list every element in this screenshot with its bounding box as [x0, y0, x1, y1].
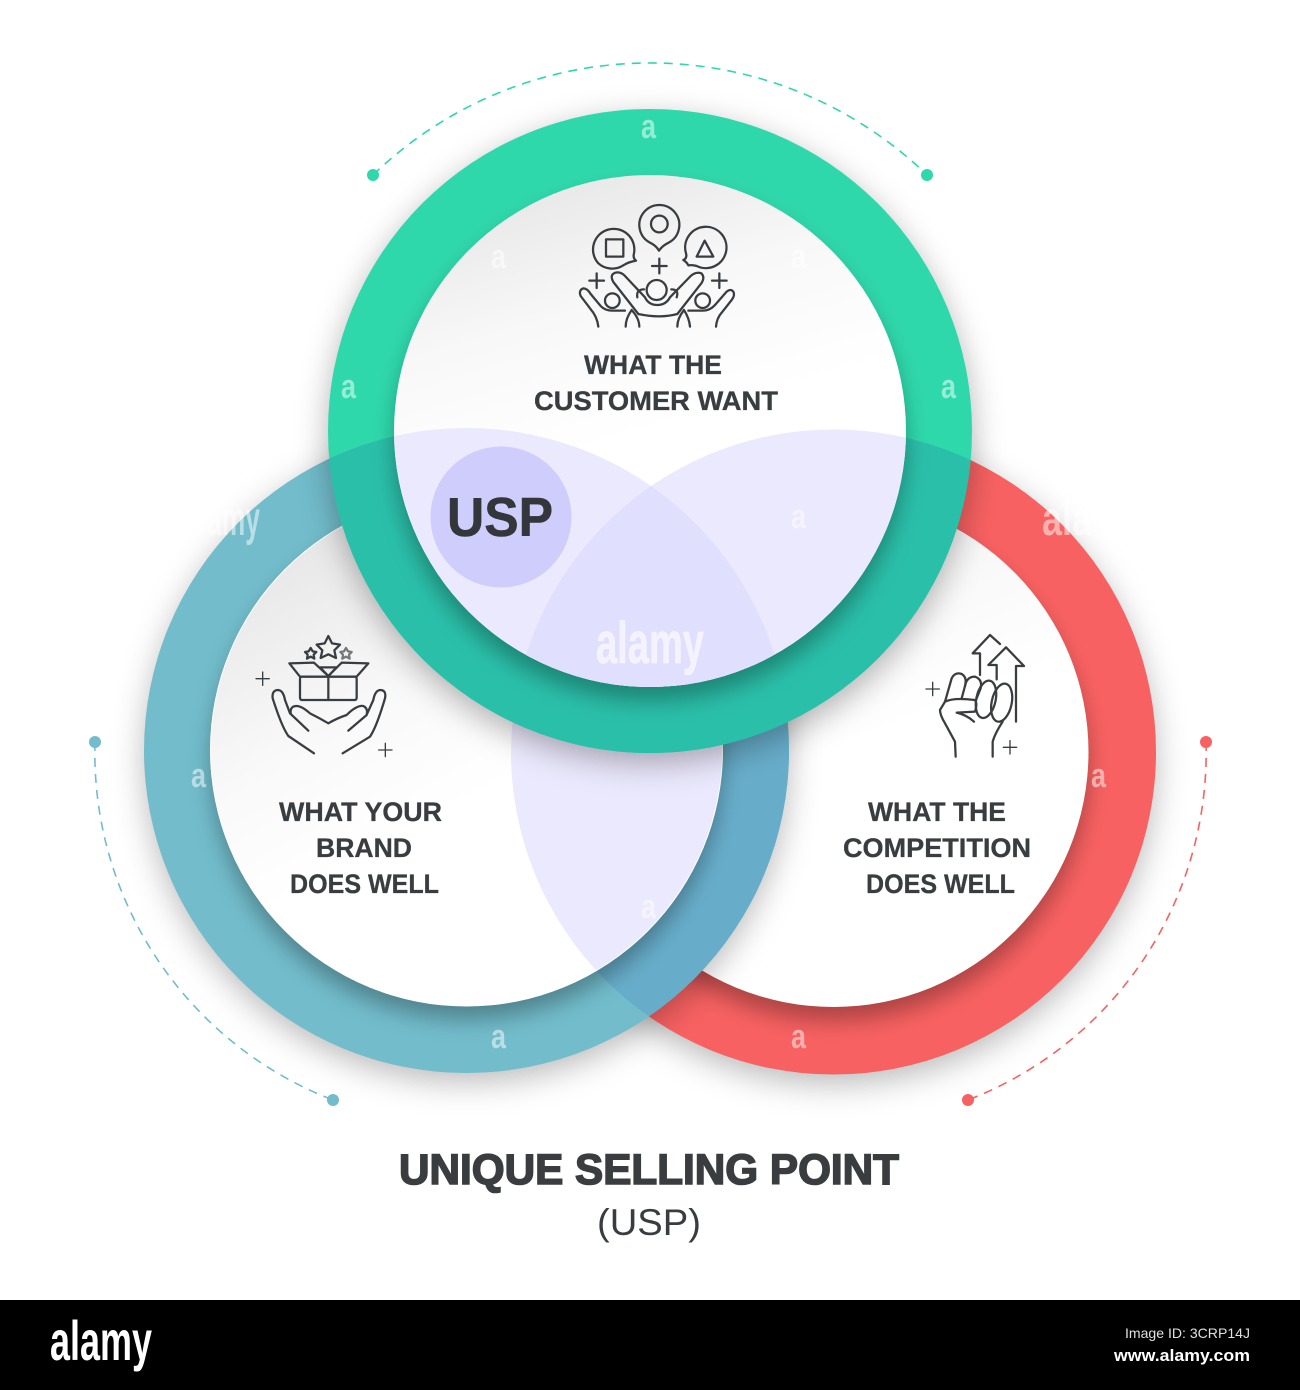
footer bar: www.alamy.com: [1113, 1346, 1250, 1365]
watermarks: ala: [1042, 493, 1092, 546]
label: what the competition does well: COMPETITION: [843, 833, 1031, 863]
icon: hands holding box with stars: [256, 636, 392, 757]
watermarks: a: [1091, 757, 1107, 795]
circle: competition (coral ring): [628, 453, 1173, 1102]
watermarks: a: [791, 238, 807, 276]
label: what the customer want: CUSTOMER WANT: [534, 386, 778, 416]
watermarks: a: [791, 1018, 807, 1056]
label: what the competition does well: WHAT THE: [868, 797, 1006, 827]
watermarks: a: [191, 757, 207, 795]
dashed arc: top: [367, 63, 933, 181]
label: what your brand does well: WHAT YOUR: [279, 797, 442, 827]
watermarks: [191, 108, 1107, 1056]
label: what the competition does well: [843, 797, 1031, 899]
label: what your brand does well: [279, 797, 442, 899]
watermarks: a: [641, 108, 657, 146]
footer bar: [0, 1300, 1300, 1390]
watermarks: a: [341, 368, 357, 406]
footer bar: Image ID: 3CRP14J: [1125, 1325, 1250, 1341]
icon: customers with speech bubbles: [580, 205, 734, 327]
USP badge: [430, 446, 572, 588]
dashed arc: left: [89, 736, 339, 1106]
title: UNIQUE SELLING POINT: [399, 1146, 899, 1194]
watermarks: amy: [207, 493, 260, 546]
label: what your brand does well: BRAND: [316, 833, 412, 863]
watermarks: a: [491, 1018, 507, 1056]
subtitle: (USP): [597, 1202, 701, 1243]
circle: customer (green ring): [310, 100, 990, 782]
USP badge: USP: [447, 486, 553, 548]
icon: fist with rising arrows: [926, 635, 1024, 757]
watermarks: a: [941, 368, 957, 406]
watermarks: a: [641, 888, 657, 926]
dashed arc: right: [962, 736, 1212, 1106]
circle: brand (teal ring): [144, 428, 789, 1082]
watermarks: a: [491, 238, 507, 276]
lavender overlap regions inside customer circle: [394, 428, 906, 687]
label: what the competition does well: DOES WELL: [866, 869, 1015, 899]
footer bar: alamy: [50, 1309, 152, 1372]
label: what the customer want: [534, 350, 778, 416]
lens: brand and competition overlap: [511, 722, 722, 970]
watermarks: alamy: [596, 611, 704, 676]
label: what your brand does well: DOES WELL: [290, 869, 439, 899]
watermarks: a: [791, 498, 807, 536]
label: what the customer want: WHAT THE: [584, 350, 722, 380]
